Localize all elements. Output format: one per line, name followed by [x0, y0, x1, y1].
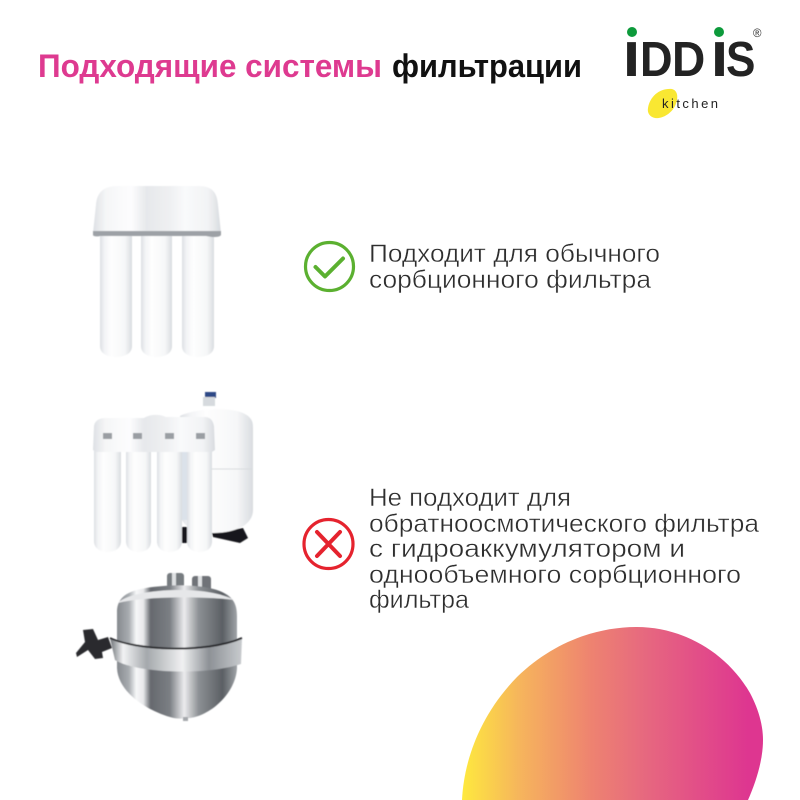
stand — [182, 527, 248, 543]
filter tubes — [100, 236, 214, 357]
base fitting — [183, 717, 188, 721]
text: not suitable: с гидроаккумулятором и — [369, 535, 685, 563]
steel body — [117, 585, 237, 719]
registered mark: ® — [753, 28, 762, 40]
logo wordmark: D — [640, 31, 673, 86]
logo kitchen word: kitchen — [662, 96, 718, 111]
text: not suitable: обратноосмотического фильтра — [369, 510, 759, 538]
product: stainless steel filter — [76, 573, 242, 721]
logo wordmark: I — [711, 32, 728, 87]
filter head — [93, 415, 215, 452]
title — [38, 48, 582, 84]
product: three-stage sorption filter — [93, 186, 221, 357]
text: not suitable: однообъемного сорбционного — [369, 561, 741, 589]
head windows — [103, 433, 205, 439]
clamp knob — [76, 629, 112, 659]
top lid highlight — [118, 590, 234, 603]
title: Подходящие системы — [38, 48, 382, 84]
filter tubes — [94, 448, 212, 552]
title: фильтрации — [392, 48, 582, 84]
text: suitable — [369, 240, 660, 294]
logo wordmark — [623, 31, 755, 87]
connector nuts — [167, 573, 211, 593]
logo wordmark: S — [726, 32, 755, 87]
icon: green check — [306, 242, 354, 290]
logo wordmark: D — [672, 33, 705, 87]
filter head — [93, 186, 221, 233]
text: not suitable: Не подходит для — [369, 484, 571, 512]
shaded gap behind tubes — [182, 450, 188, 520]
clamp dark edge — [110, 638, 242, 649]
icon: red cross — [304, 520, 353, 568]
text: not suitable: фильтра — [369, 586, 469, 614]
filter head grey rim — [93, 231, 221, 237]
logo yellow spot — [648, 89, 677, 118]
product: reverse osmosis filter with tank — [93, 392, 253, 552]
logo wordmark: I — [623, 32, 640, 87]
clamp band — [110, 638, 242, 672]
text: suitable: Подходит для обычного — [369, 240, 660, 268]
logo green dots — [627, 27, 724, 37]
decorative gradient blob — [462, 627, 763, 800]
valve on tank — [203, 392, 216, 406]
storage tank — [180, 409, 253, 533]
logo: IDDIS kitchen — [623, 27, 762, 118]
text: suitable: сорбционного фильтра — [369, 266, 651, 294]
text: not suitable — [369, 484, 759, 614]
tank seam — [212, 468, 253, 470]
